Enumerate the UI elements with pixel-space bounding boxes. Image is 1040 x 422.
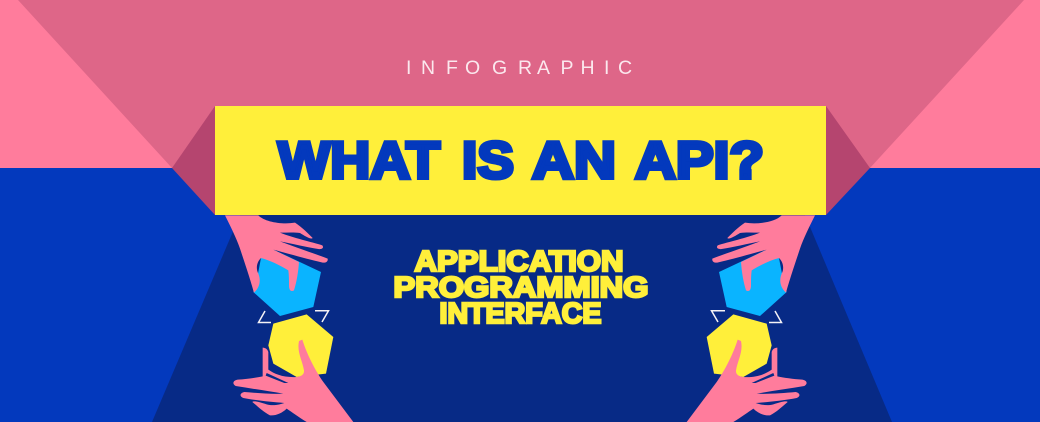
right banner fold — [826, 106, 870, 215]
subtitle line 3: INTERFACE — [440, 298, 602, 330]
icon: connector arrow — [712, 311, 725, 322]
subtitle line 2: PROGRAMMING — [394, 272, 648, 304]
title word: API? — [635, 132, 764, 190]
navy centre trapezoid — [152, 215, 892, 422]
title — [278, 132, 764, 190]
title word: AN — [532, 132, 616, 190]
background: mauve top panel — [0, 0, 1040, 169]
title word: WHAT — [278, 132, 440, 190]
left banner fold — [172, 106, 215, 215]
illustration: right hands and hexagons — [687, 215, 815, 422]
icon: lower hand holding yellow hexagon — [687, 314, 807, 422]
illustration: left hands and hexagons — [225, 215, 353, 422]
subtitle line 1: APPLICATION — [414, 246, 624, 278]
icon: connector arrow — [769, 311, 782, 322]
background: blue lower panel — [0, 168, 1040, 422]
subtitle — [394, 246, 648, 330]
title banner — [215, 106, 826, 215]
eyebrow text: INFOGRAPHIC — [406, 57, 632, 79]
icon: left connector arrow — [258, 311, 271, 322]
icon: lower hand holding yellow hexagon — [233, 314, 353, 422]
right pink triangle — [870, 0, 1040, 168]
title word: IS — [462, 132, 514, 190]
icon: upper hand holding blue hexagon — [712, 215, 815, 316]
icon: upper hand holding blue hexagon — [225, 215, 328, 316]
icon: right connector arrow — [315, 311, 328, 322]
left pink triangle — [0, 0, 172, 168]
